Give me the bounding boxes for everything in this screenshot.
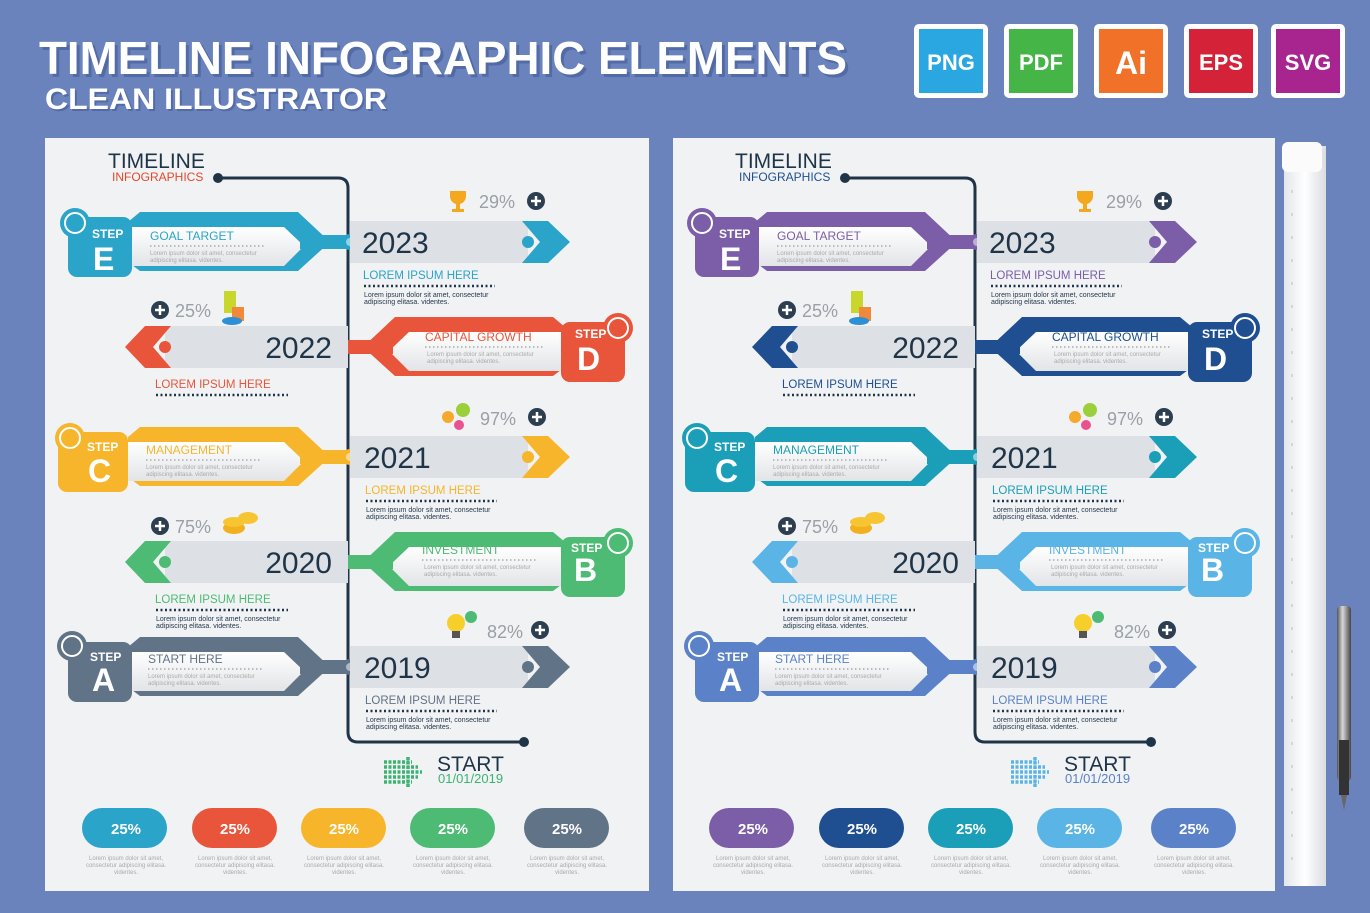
pills: Lorem ipsum dolor sit amet, <box>1043 856 1117 862</box>
row: step C 2021: 97% <box>1107 409 1143 429</box>
pills: consectetur adipiscing elitasa. <box>195 863 275 869</box>
row: step D 2022: STEP <box>575 327 606 341</box>
row: step B 2020: 75% <box>175 517 211 537</box>
icon: SVG <box>1271 24 1345 98</box>
row: step A 2019: adipiscing elitasa. videntes. <box>366 724 451 731</box>
row: step D 2022: 25% <box>802 301 838 321</box>
pills: videntes. <box>332 870 356 876</box>
row: step E 2023 <box>60 191 570 306</box>
icon: SVG: SVG <box>1285 50 1331 75</box>
start marker: START <box>437 753 504 776</box>
icon: PNG: PNG <box>927 50 975 75</box>
row: step D 2022 <box>752 291 1260 395</box>
row: step A 2019: adipiscing elitasa. videntes. <box>775 681 848 687</box>
icon: EPS: EPS <box>1199 50 1243 75</box>
heading: timeline <box>108 150 205 184</box>
pills: 25% <box>220 821 250 838</box>
pills: consectetur adipiscing elitasa. <box>527 863 607 869</box>
panel: left <box>45 138 649 891</box>
row: step C 2021: adipiscing elitasa. videntes. <box>146 472 219 478</box>
row: step B 2020: B <box>1201 552 1224 588</box>
row: step D 2022: Lorem ipsum dolor sit amet, consectetur <box>1054 352 1161 358</box>
row: step C 2021: Lorem ipsum dolor sit amet, consectetur <box>993 507 1118 514</box>
row: step A 2019: Lorem ipsum dolor sit amet, consectetur <box>775 674 882 680</box>
row: step D 2022: 2022 <box>892 332 959 365</box>
row: step A 2019: Lorem ipsum dolor sit amet, consectetur <box>366 717 491 724</box>
row: step B 2020: adipiscing elitasa. videntes. <box>1051 572 1124 578</box>
row: step C 2021: STEP <box>87 440 118 454</box>
row: step D 2022: CAPITAL GROWTH <box>1052 330 1159 344</box>
row: step D 2022: LOREM IPSUM HERE <box>155 379 271 391</box>
row: step D 2022: D <box>577 341 600 377</box>
timeline line <box>218 178 524 742</box>
row: step B 2020: B <box>574 552 597 588</box>
pills: videntes. <box>555 870 579 876</box>
row: step A 2019: Lorem ipsum dolor sit amet, consectetur <box>148 674 255 680</box>
row: step E 2023: E <box>720 241 741 277</box>
row: step E 2023: 29% <box>1106 192 1142 212</box>
title: TIMELINE INFOGRAPHIC ELEMENTS <box>39 32 847 84</box>
row: step A 2019: A <box>719 662 742 698</box>
row: step B 2020: Lorem ipsum dolor sit amet, consectetur <box>1051 565 1158 571</box>
row: step A 2019: A <box>92 662 115 698</box>
row: step D 2022: adipiscing elitasa. videntes. <box>1054 359 1127 365</box>
subtitle: CLEAN ILLUSTRATOR <box>47 85 389 118</box>
pills: Lorem ipsum dolor sit amet, <box>89 856 163 862</box>
row: step C 2021: 97% <box>480 409 516 429</box>
row: step D 2022 <box>125 291 633 395</box>
pills: videntes. <box>850 870 874 876</box>
row: step B 2020: STEP <box>1198 541 1229 555</box>
row: step E 2023: E <box>93 241 114 277</box>
pills: consectetur adipiscing elitasa. <box>1040 863 1120 869</box>
pills: Lorem ipsum dolor sit amet, <box>934 856 1008 862</box>
row: step A 2019: START HERE <box>148 652 223 666</box>
pills: consectetur adipiscing elitasa. <box>304 863 384 869</box>
heading: timeline: TIMELINE <box>108 150 205 173</box>
title: TIMELINE INFOGRAPHIC ELEMENTS <box>42 35 850 87</box>
row: step B 2020 <box>125 512 633 630</box>
row: step B 2020: Lorem ipsum dolor sit amet, consectetur <box>424 565 531 571</box>
pills: consectetur adipiscing elitasa. <box>86 863 166 869</box>
icon: PDF: PDF <box>1019 50 1063 75</box>
row: step C 2021: Lorem ipsum dolor sit amet, consectetur <box>773 465 880 471</box>
pills: videntes. <box>1182 870 1206 876</box>
format icons <box>914 24 1345 98</box>
icon: Ai: Ai <box>1115 45 1147 81</box>
pills: 25% <box>956 821 986 838</box>
start marker <box>1011 753 1131 787</box>
row: step C 2021: Lorem ipsum dolor sit amet, consectetur <box>366 507 491 514</box>
pills: Lorem ipsum dolor sit amet, <box>1157 856 1231 862</box>
row: step C 2021: 2021 <box>991 442 1058 475</box>
row: step B 2020 <box>752 512 1260 630</box>
row: step A 2019: 2019 <box>991 652 1058 685</box>
row: step C 2021: Lorem ipsum dolor sit amet, consectetur <box>146 465 253 471</box>
pills: 25% <box>552 821 582 838</box>
row: step E 2023: adipiscing elitasa. videntes. <box>777 258 850 264</box>
row: step B 2020: LOREM IPSUM HERE <box>155 594 271 606</box>
row: step E 2023: Lorem ipsum dolor sit amet, consectetur <box>777 251 884 257</box>
pills: videntes. <box>223 870 247 876</box>
row: step C 2021: STEP <box>714 440 745 454</box>
pills: videntes. <box>741 870 765 876</box>
row: step E 2023: Lorem ipsum dolor sit amet, consectetur <box>150 251 257 257</box>
row: step E 2023: Lorem ipsum dolor sit amet, consectetur <box>991 292 1116 299</box>
row: step C 2021: 2021 <box>364 442 431 475</box>
pen <box>1337 606 1351 810</box>
heading: timeline: INFOGRAPHICS <box>739 170 830 184</box>
row: step E 2023: 2023 <box>989 227 1056 260</box>
pills: 25% <box>847 821 877 838</box>
pills: 25% <box>329 821 359 838</box>
row: step B 2020: LOREM IPSUM HERE <box>782 594 898 606</box>
row: step B 2020: adipiscing elitasa. videntes. <box>156 623 241 630</box>
row: step C 2021: MANAGEMENT <box>773 443 860 457</box>
pills: 25% <box>1065 821 1095 838</box>
row: step B 2020: 2020 <box>892 547 959 580</box>
row: step C 2021: MANAGEMENT <box>146 443 233 457</box>
row: step D 2022: 25% <box>175 301 211 321</box>
row: step C 2021: C <box>715 453 738 489</box>
row: step E 2023: adipiscing elitasa. videntes. <box>991 299 1076 306</box>
pills: Lorem ipsum dolor sit amet, <box>825 856 899 862</box>
pills: Lorem ipsum dolor sit amet, <box>307 856 381 862</box>
rolled paper <box>1282 142 1326 886</box>
row: step B 2020: INVESTMENT <box>422 543 500 557</box>
icon: Ai <box>1094 24 1168 98</box>
row: step D 2022: LOREM IPSUM HERE <box>782 379 898 391</box>
row: step D 2022: adipiscing elitasa. videntes. <box>427 359 500 365</box>
row: step E 2023: GOAL TARGET <box>150 229 234 243</box>
pills: 25% <box>438 821 468 838</box>
row: step E 2023 <box>687 191 1197 306</box>
pills: consectetur adipiscing elitasa. <box>822 863 902 869</box>
row: step C 2021: LOREM IPSUM HERE <box>365 485 481 497</box>
row: step B 2020: STEP <box>571 541 602 555</box>
row: step A 2019 <box>57 611 570 731</box>
row: step C 2021: adipiscing elitasa. videntes. <box>366 514 451 521</box>
pills: consectetur adipiscing elitasa. <box>931 863 1011 869</box>
pills: videntes. <box>114 870 138 876</box>
row: step A 2019: Lorem ipsum dolor sit amet, consectetur <box>993 717 1118 724</box>
pills: consectetur adipiscing elitasa. <box>713 863 793 869</box>
start marker: START <box>1064 753 1131 776</box>
row: step A 2019 <box>684 611 1197 731</box>
row: step E 2023: GOAL TARGET <box>777 229 861 243</box>
row: step A 2019: START HERE <box>775 652 850 666</box>
row: step B 2020: adipiscing elitasa. videntes. <box>424 572 497 578</box>
row: step A 2019: 82% <box>487 622 523 642</box>
row: step B 2020: 75% <box>802 517 838 537</box>
row: step C 2021: C <box>88 453 111 489</box>
timeline line <box>845 178 1151 742</box>
pills: videntes. <box>441 870 465 876</box>
row: step B 2020: 2020 <box>265 547 332 580</box>
row: step A 2019: adipiscing elitasa. videntes. <box>148 681 221 687</box>
row: step B 2020: adipiscing elitasa. videntes. <box>783 623 868 630</box>
icon: PDF <box>1004 24 1078 98</box>
row: step D 2022: Lorem ipsum dolor sit amet, consectetur <box>427 352 534 358</box>
pills: Lorem ipsum dolor sit amet, <box>530 856 604 862</box>
pills: 25% <box>738 821 768 838</box>
pills: Lorem ipsum dolor sit amet, <box>198 856 272 862</box>
row: step E 2023: Lorem ipsum dolor sit amet, consectetur <box>364 292 489 299</box>
row: step B 2020: INVESTMENT <box>1049 543 1127 557</box>
row: step E 2023: 2023 <box>362 227 429 260</box>
icon: EPS <box>1184 24 1258 98</box>
panel: right <box>673 138 1275 891</box>
pills: consectetur adipiscing elitasa. <box>413 863 493 869</box>
row: step A 2019: LOREM IPSUM HERE <box>992 695 1108 707</box>
row: step E 2023: LOREM IPSUM HERE <box>990 270 1106 282</box>
row: step C 2021: adipiscing elitasa. videntes. <box>993 514 1078 521</box>
heading: timeline: TIMELINE <box>735 150 832 173</box>
row: step A 2019: 2019 <box>364 652 431 685</box>
row: step D 2022: 2022 <box>265 332 332 365</box>
pills: videntes. <box>959 870 983 876</box>
pills <box>82 808 609 876</box>
start marker: 01/01/2019 <box>1065 771 1130 786</box>
icon: PNG <box>914 24 988 98</box>
row: step C 2021 <box>682 403 1197 521</box>
row: step D 2022: D <box>1204 341 1227 377</box>
pills: 25% <box>111 821 141 838</box>
row: step C 2021 <box>55 403 570 521</box>
row: step E 2023: STEP <box>719 227 750 241</box>
row: step D 2022: CAPITAL GROWTH <box>425 330 532 344</box>
row: step C 2021: adipiscing elitasa. videntes. <box>773 472 846 478</box>
pills <box>709 808 1236 876</box>
pills: Lorem ipsum dolor sit amet, <box>416 856 490 862</box>
pills: videntes. <box>1068 870 1092 876</box>
row: step D 2022: STEP <box>1202 327 1233 341</box>
pills: 25% <box>1179 821 1209 838</box>
row: step A 2019: LOREM IPSUM HERE <box>365 695 481 707</box>
pills: consectetur adipiscing elitasa. <box>1154 863 1234 869</box>
row: step E 2023: 29% <box>479 192 515 212</box>
start marker: 01/01/2019 <box>438 771 503 786</box>
pills: Lorem ipsum dolor sit amet, <box>716 856 790 862</box>
row: step B 2020: Lorem ipsum dolor sit amet, consectetur <box>783 616 908 623</box>
row: step E 2023: adipiscing elitasa. videntes. <box>150 258 223 264</box>
subtitle: CLEAN ILLUSTRATOR <box>45 83 387 116</box>
start marker <box>384 753 504 787</box>
row: step A 2019: adipiscing elitasa. videntes. <box>993 724 1078 731</box>
heading: timeline <box>735 150 832 184</box>
row: step A 2019: STEP <box>717 650 748 664</box>
heading: timeline: INFOGRAPHICS <box>112 170 203 184</box>
row: step A 2019: STEP <box>90 650 121 664</box>
row: step B 2020: Lorem ipsum dolor sit amet, consectetur <box>156 616 281 623</box>
row: step E 2023: STEP <box>92 227 123 241</box>
row: step E 2023: adipiscing elitasa. videntes. <box>364 299 449 306</box>
row: step C 2021: LOREM IPSUM HERE <box>992 485 1108 497</box>
row: step A 2019: 82% <box>1114 622 1150 642</box>
row: step E 2023: LOREM IPSUM HERE <box>363 270 479 282</box>
